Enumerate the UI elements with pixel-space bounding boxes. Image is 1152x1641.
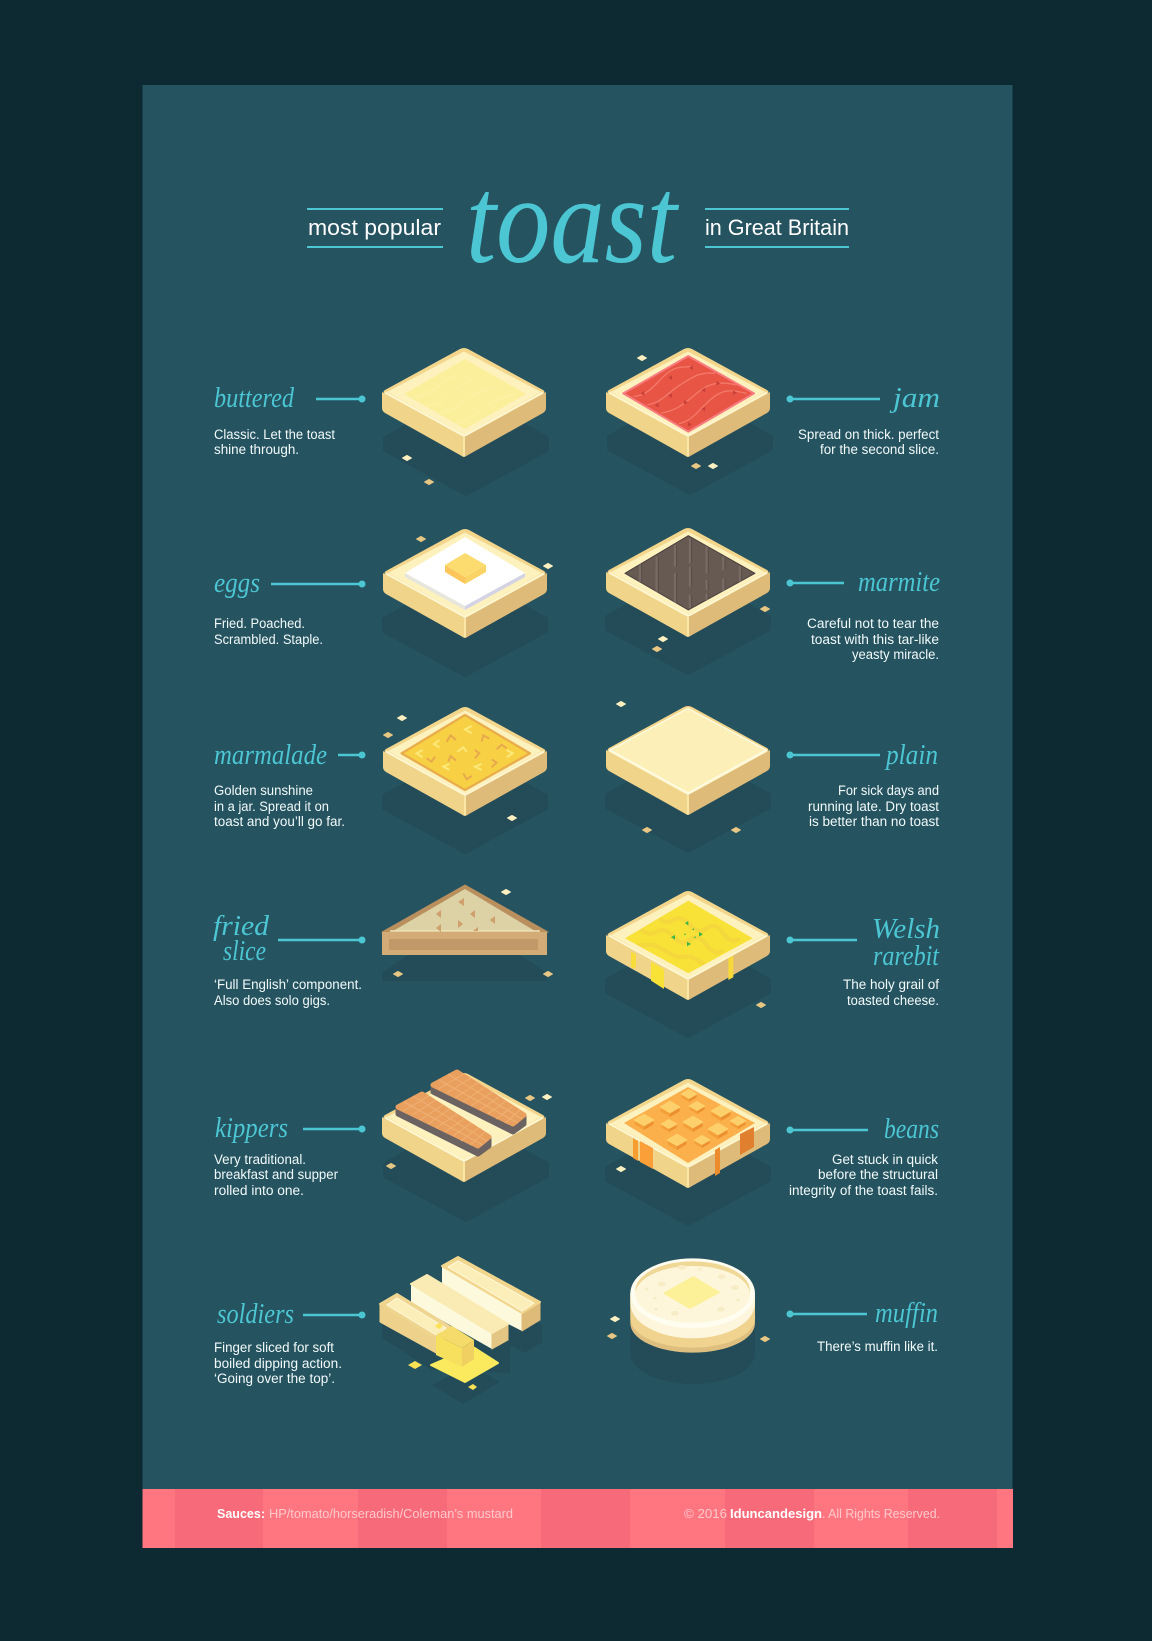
connector: [786, 1126, 868, 1134]
item: marmalade: [214, 707, 547, 852]
description: integrity of the toast fails.: [789, 1183, 938, 1198]
description: before the structural: [818, 1167, 938, 1182]
description: yeasty miracle.: [852, 647, 939, 662]
connector: [786, 396, 880, 402]
description: shine through.: [214, 442, 299, 457]
item: muffin: [608, 1258, 938, 1384]
label: soldiers: [217, 1299, 294, 1330]
title prefix: most popular: [308, 215, 441, 240]
connector: [316, 396, 366, 402]
crumbs: [608, 1316, 770, 1342]
connector: [303, 1312, 366, 1318]
toast illustration: [382, 348, 547, 494]
label: [872, 914, 940, 972]
item: buttered: [214, 348, 547, 494]
description: [214, 783, 345, 829]
item: plain: [606, 701, 939, 851]
connector: [338, 752, 366, 758]
copyright: Iduncandesign: [730, 1506, 822, 1521]
description: [808, 783, 939, 829]
description: [789, 1152, 938, 1198]
description: There’s muffin like it.: [817, 1339, 938, 1354]
item: kippers: [214, 1072, 552, 1220]
description: [843, 977, 939, 1008]
description: boiled dipping action.: [214, 1356, 342, 1371]
connector: [303, 1126, 366, 1132]
title suffix: in Great Britain: [705, 215, 849, 240]
description: Get stuck in quick: [832, 1152, 938, 1167]
toast illustration: [380, 1257, 542, 1404]
description: is better than no toast: [809, 814, 939, 829]
toast illustration: [383, 529, 552, 675]
connector: [271, 580, 366, 588]
description: Very traditional.: [214, 1152, 306, 1167]
description: rolled into one.: [214, 1183, 304, 1198]
label: kippers: [215, 1113, 288, 1144]
item: marmite: [606, 528, 940, 673]
label: rarebit: [873, 941, 940, 972]
description: The holy grail of: [843, 977, 939, 992]
description: for the second slice.: [820, 442, 939, 457]
connector: [786, 1310, 867, 1318]
footer band: [142, 1489, 1013, 1548]
label: beans: [884, 1114, 939, 1145]
description: toast and you’ll go far.: [214, 814, 345, 829]
item: fried slice: [213, 885, 552, 1008]
label: fried: [213, 911, 270, 942]
title left rules: [307, 209, 849, 247]
description: running late. Dry toast: [808, 799, 939, 814]
toast illustration: [606, 891, 770, 1036]
toast illustration: [606, 701, 770, 851]
description: Golden sunshine: [214, 783, 313, 798]
description: Spread on thick. perfect: [798, 427, 939, 442]
connector: [786, 752, 880, 758]
panel: poster: [142, 85, 1012, 1548]
description: [214, 616, 323, 647]
description: For sick days and: [838, 783, 939, 798]
item: beans: [606, 1079, 939, 1224]
sauces note: HP/tomato/horseradish/Coleman’s mustard: [269, 1506, 513, 1521]
label: plain: [884, 740, 938, 771]
toast illustration: [606, 348, 771, 493]
item: soldiers: [214, 1257, 542, 1404]
label: buttered: [214, 383, 295, 414]
label: jam: [890, 383, 940, 414]
description: toasted cheese.: [847, 993, 939, 1008]
toast illustration: [606, 1079, 770, 1224]
description: [214, 1340, 342, 1386]
copyright: © 2016: [684, 1506, 727, 1521]
description: [214, 427, 335, 457]
label: Welsh: [872, 914, 940, 945]
toast illustration: [382, 1072, 552, 1220]
connector: [786, 580, 844, 586]
infographic: [142, 85, 1013, 1548]
connector: [786, 936, 857, 944]
label: muffin: [875, 1298, 938, 1329]
description: Careful not to tear the: [807, 616, 939, 631]
description: Also does solo gigs.: [214, 993, 330, 1008]
title: [307, 152, 849, 289]
copyright: [684, 1506, 940, 1521]
label: marmite: [858, 567, 940, 598]
description: ‘Going over the top’.: [214, 1371, 335, 1386]
description: [214, 977, 362, 1008]
description: toast with this tar-like: [811, 632, 939, 647]
label: marmalade: [214, 740, 327, 771]
copyright: . All Rights Reserved.: [822, 1506, 940, 1521]
label: [213, 911, 270, 967]
item: Welsh rarebit: [606, 891, 940, 1036]
label: eggs: [214, 568, 260, 599]
muffin illustration: [630, 1258, 755, 1384]
title word toast: toast: [466, 152, 679, 289]
description: Finger sliced for soft: [214, 1340, 334, 1355]
toast illustration: [383, 707, 547, 852]
description: [798, 427, 939, 457]
sauces note: Sauces:: [217, 1506, 265, 1521]
connector: [278, 936, 366, 944]
description: breakfast and supper: [214, 1167, 338, 1182]
item: eggs: [214, 529, 552, 675]
description: Classic. Let the toast: [214, 427, 335, 442]
description: Scrambled. Staple.: [214, 632, 323, 647]
description: in a jar. Spread it on: [214, 799, 329, 814]
item: jam: [606, 348, 940, 493]
toast illustration: [606, 528, 770, 673]
toast illustration: [382, 885, 552, 981]
description: [807, 616, 939, 662]
label: slice: [223, 936, 266, 967]
description: [214, 1152, 338, 1198]
description: Fried. Poached.: [214, 616, 305, 631]
description: ‘Full English’ component.: [214, 977, 362, 992]
